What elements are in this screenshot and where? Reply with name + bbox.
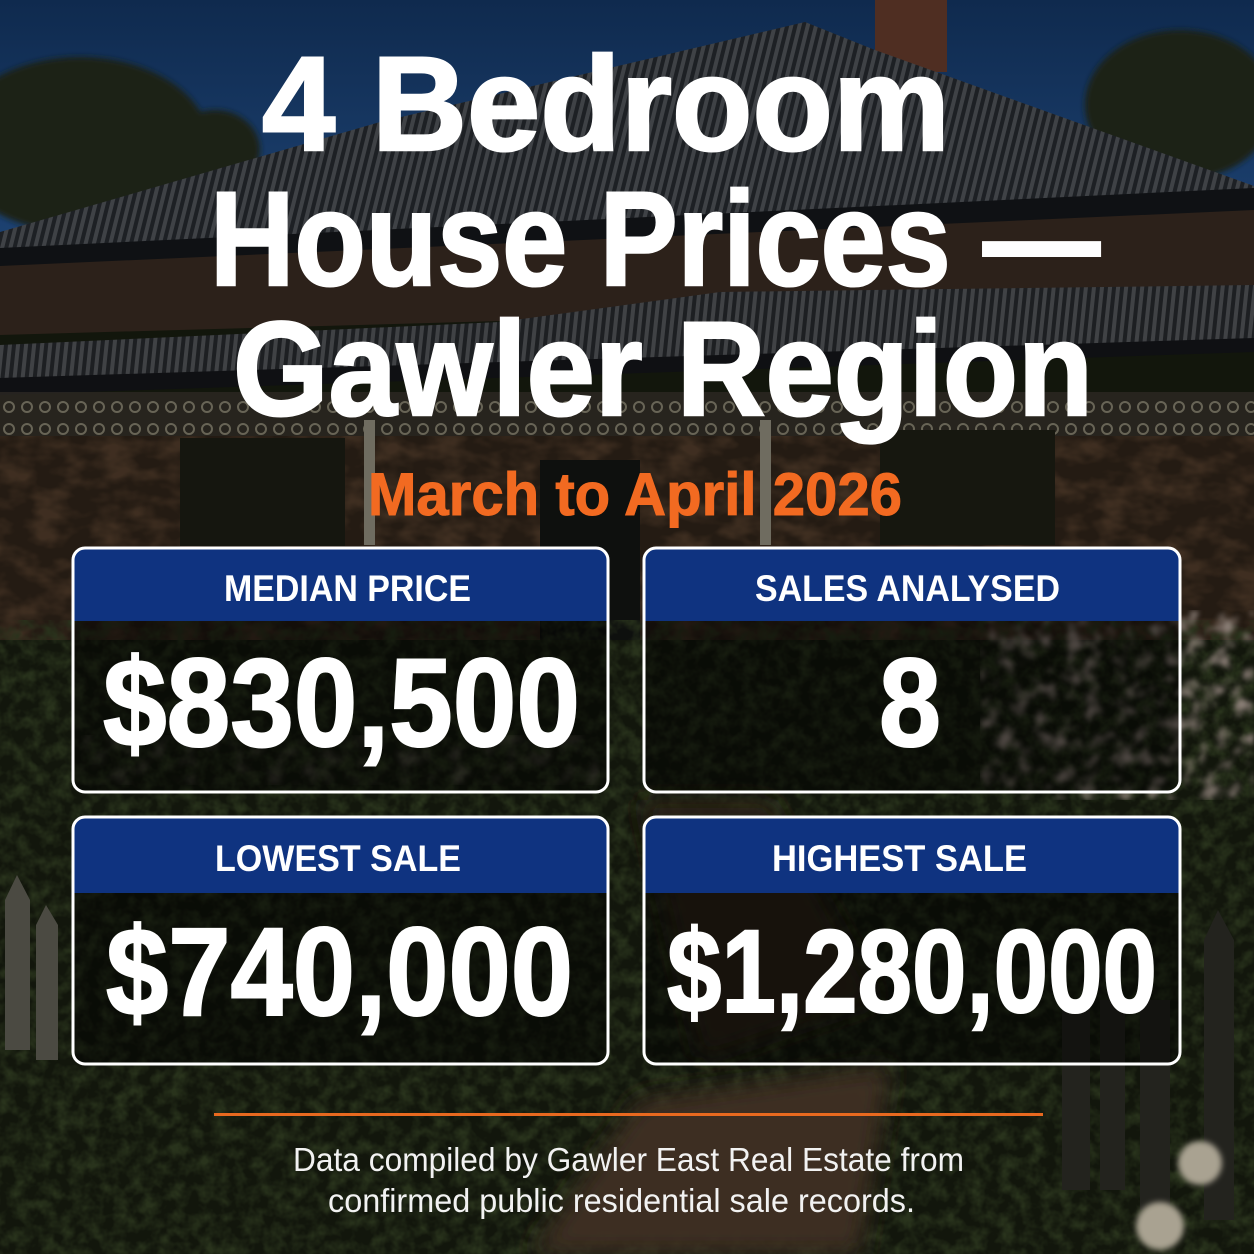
- eaves and upper wall: [0, 188, 1254, 268]
- card: median price: [73, 548, 608, 792]
- card label: MEDIAN PRICE: [224, 568, 471, 609]
- card label: SALES ANALYSED: [755, 568, 1060, 609]
- card: lowest sale: [73, 817, 608, 1064]
- card: sales analysed: [644, 548, 1180, 792]
- picket fence left: [5, 875, 58, 1060]
- veranda posts: [364, 420, 375, 545]
- card label: LOWEST SALE: [215, 838, 461, 879]
- house wall: [0, 436, 1254, 656]
- footer note: confirmed public residential sale records.: [328, 1182, 915, 1219]
- brick path: [530, 1065, 890, 1254]
- main roof: [0, 22, 1254, 258]
- card value: 8: [879, 634, 941, 773]
- card value: $830,500: [103, 634, 580, 773]
- veranda roof: [0, 285, 1254, 382]
- title: [210, 30, 1100, 444]
- card: highest sale: [644, 817, 1180, 1064]
- card header: [644, 548, 1180, 621]
- footer note: Data compiled by Gawler East Real Estate from: [293, 1141, 964, 1178]
- card header: [73, 817, 608, 893]
- card header: [73, 548, 608, 621]
- picket fence right: [1062, 910, 1234, 1220]
- windows: [180, 438, 345, 546]
- trees behind the roof: [0, 30, 1254, 233]
- card header: [644, 817, 1180, 893]
- subtitle: March to April 2026: [368, 461, 902, 528]
- card label: HIGHEST SALE: [772, 838, 1027, 879]
- footer note: [293, 1141, 964, 1219]
- card value: $740,000: [106, 903, 573, 1042]
- card value: $1,280,000: [667, 906, 1157, 1038]
- title: House Prices —: [210, 165, 1100, 314]
- garden: [0, 640, 1254, 1254]
- title: 4 Bedroom: [262, 30, 950, 179]
- veranda lace trim: [0, 392, 1254, 436]
- white flowers bottom right: [1136, 1141, 1222, 1250]
- chimney: [875, 0, 947, 72]
- title: Gawler Region: [233, 295, 1093, 444]
